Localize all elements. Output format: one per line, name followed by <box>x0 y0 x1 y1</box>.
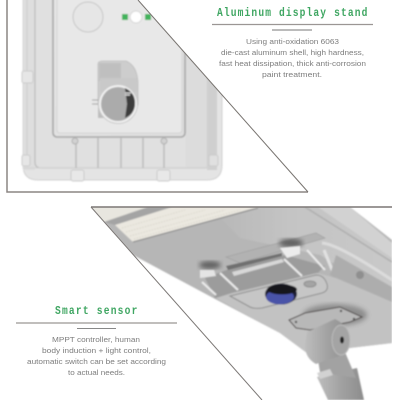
sensor lens <box>265 284 297 304</box>
text block: sensor description: automatic switch can be set according <box>27 357 166 366</box>
text block: sensor description: MPPT controller, human <box>52 335 140 344</box>
panel: aluminum display stand photo <box>22 0 222 181</box>
text block: sensor description: body induction + light control, <box>42 346 151 355</box>
frame: top panel outline <box>7 0 308 192</box>
mounting plate <box>53 0 185 137</box>
heading: Aluminum display stand: Aluminum display stand <box>217 7 367 20</box>
panel: smart sensor photo <box>91 207 392 400</box>
text block: aluminum description: die-cast aluminum shell, high hardness, <box>221 48 364 57</box>
ribs under plate <box>76 138 164 168</box>
plate screws <box>72 138 167 144</box>
lamp body underside <box>105 212 392 328</box>
heading rule <box>212 24 373 30</box>
text block: sensor description: to actual needs. <box>68 368 125 377</box>
pole arm <box>305 319 364 400</box>
lamp housing outer shell <box>22 0 222 181</box>
upper right housing bands <box>255 208 392 286</box>
pole bracket <box>92 61 138 124</box>
heading rule <box>16 323 177 328</box>
frame: lower panel outline <box>91 207 392 400</box>
round cover <box>73 2 103 32</box>
bracket base plate <box>289 304 367 330</box>
text block: aluminum description <box>219 37 366 79</box>
LED modules <box>91 207 258 242</box>
mounting arms <box>197 232 392 300</box>
text block: aluminum description: Using anti-oxidation 6063 <box>246 37 339 46</box>
plate bolt <box>304 281 316 287</box>
text block: aluminum description: paint treatment. <box>262 70 322 79</box>
sensor plate <box>216 273 392 353</box>
indicator lights <box>121 12 152 22</box>
text block: aluminum description: fast heat dissipation, thick anti-corrosion <box>219 59 366 68</box>
text block: sensor description <box>27 335 166 377</box>
heading: Smart sensor: Smart sensor <box>55 305 137 318</box>
